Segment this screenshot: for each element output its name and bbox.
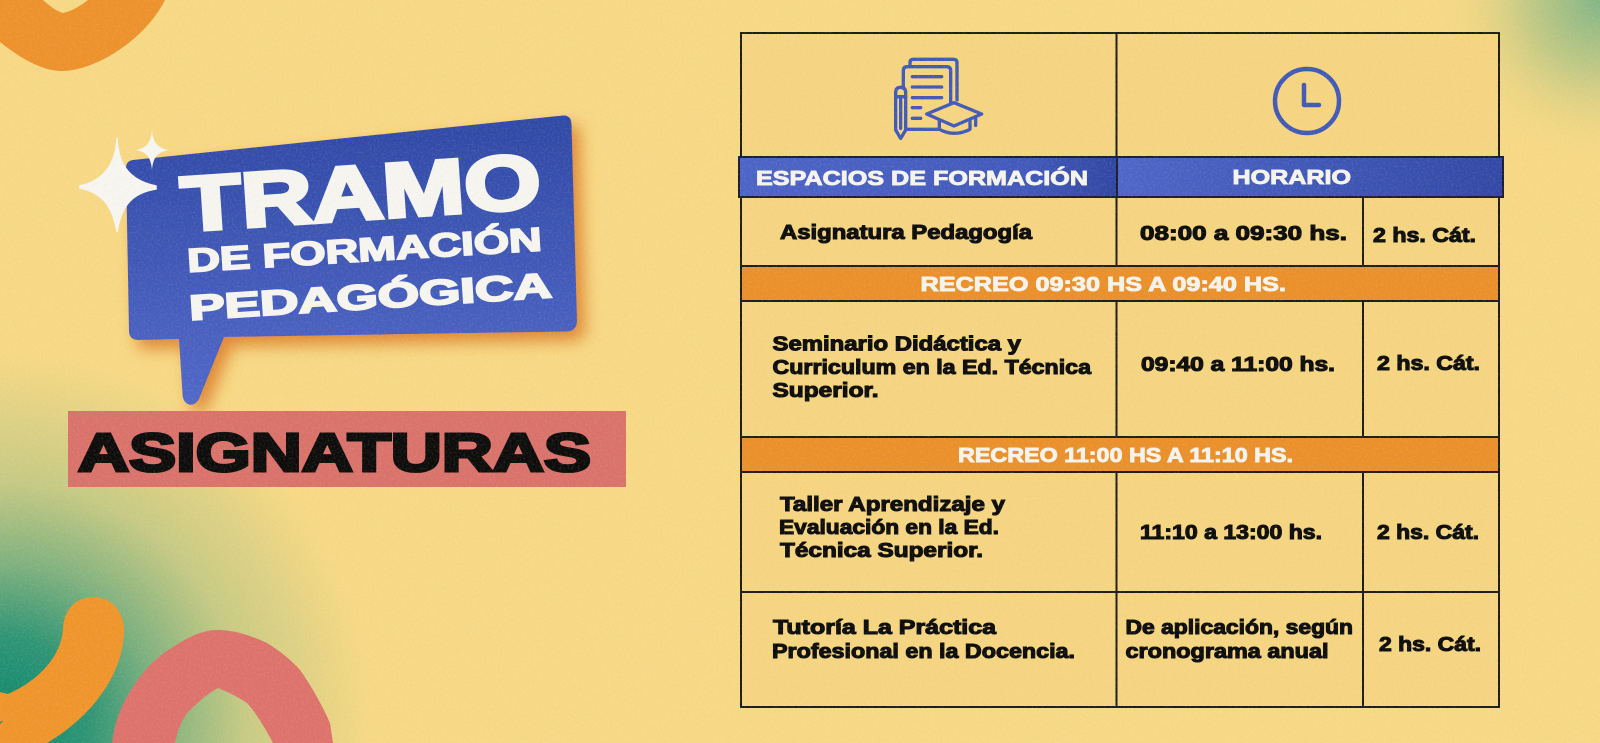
decorative orange shape: top left [0,0,165,71]
row: taller: Taller Aprendizaje y [780,494,1006,516]
icon: small sparkle [136,130,169,170]
row: taller: 11:10 a 13:00 hs. [1140,522,1322,544]
row: seminario [772,334,1480,402]
schedule table [739,33,1503,707]
header: horario [1117,157,1503,197]
bubble shape [126,115,577,405]
title line: PEDAGÓGICA: PEDAGÓGICA [188,265,553,328]
subtitle banner [68,411,626,487]
break bar 2 [741,437,1499,472]
row: pedagogia: 08:00 a 09:30 hs. [1140,223,1347,245]
row: taller: Evaluación en la Ed. [779,517,999,539]
icon: clock [1275,69,1339,133]
row: tutoria: De aplicación, según [1126,617,1353,639]
row: taller [779,494,1479,562]
row: pedagogia [780,222,1476,247]
header: horario: HORARIO [1232,167,1351,189]
title line: DE FORMACIÓN: DE FORMACIÓN [186,220,543,279]
row: tutoria [772,617,1481,663]
icon: documents, pencil and graduation cap [896,59,982,138]
row: taller: 2 hs. Cát. [1377,522,1479,544]
row: seminario: 09:40 a 11:00 hs. [1141,354,1335,376]
row: pedagogia: Asignatura Pedagogía [780,222,1033,244]
icon: large sparkle [80,138,156,232]
header: espacios de formacion [739,157,1117,197]
break bar 1 [741,266,1499,301]
row: tutoria: Profesional en la Docencia. [772,641,1075,663]
row: pedagogia: 2 hs. Cát. [1373,225,1476,247]
row: seminario: Seminario Didáctica y [772,334,1022,356]
row: seminario: Curriculum en la Ed. Técnica [772,357,1092,379]
break bar 2: RECREO 11:00 HS A 11:10 HS. [958,445,1293,467]
row: tutoria: Tutoría La Práctica [773,617,997,639]
row: tutoria: 2 hs. Cát. [1379,634,1481,656]
break bar 1: RECREO 09:30 HS A 09:40 HS. [920,274,1286,296]
speech bubble title [126,115,577,405]
decorative orange shape: bottom left [0,597,124,743]
row: tutoria: cronograma anual [1126,641,1328,663]
header: espacios de formacion: ESPACIOS DE FORMACIÓN [756,166,1088,190]
row: seminario: 2 hs. Cát. [1377,353,1480,375]
row: seminario: Superior. [772,380,878,402]
decorative pink shape: bottom [112,630,333,743]
subtitle text: ASIGNATURAS [78,423,591,483]
table grid [741,33,1499,707]
row: taller: Técnica Superior. [780,540,983,562]
title line: TRAMO: TRAMO [178,138,543,248]
